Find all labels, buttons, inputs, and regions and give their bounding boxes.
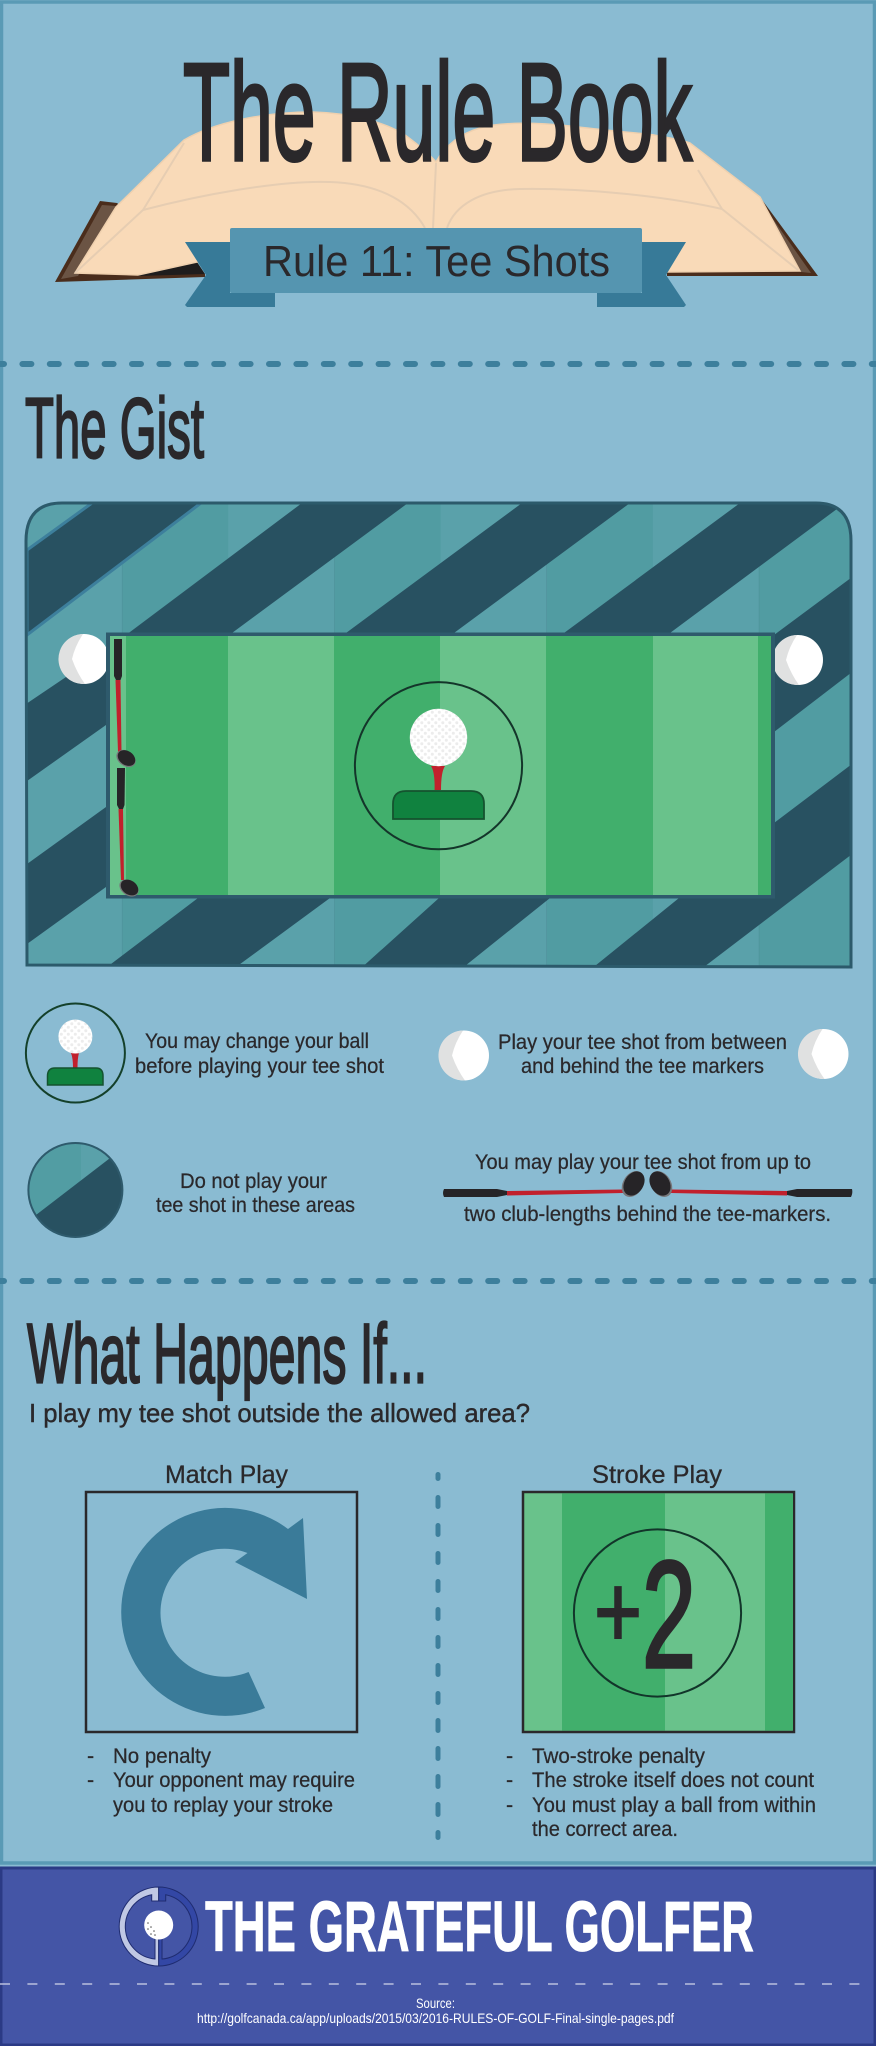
legend text top: You may play your tee shot from up to <box>475 1150 811 1174</box>
source: Source: <box>416 1995 455 2011</box>
legend: two club-lengths <box>443 1150 852 1226</box>
list: Your opponent may require <box>113 1768 355 1792</box>
legend text: and behind the tee markers <box>521 1054 764 1078</box>
legend text <box>156 1169 355 1217</box>
list: - <box>87 1768 94 1792</box>
subheading: I play my tee shot outside the allowed area? <box>29 1398 530 1428</box>
list: the correct area. <box>532 1817 678 1841</box>
legend text <box>498 1030 787 1078</box>
list: Two-stroke penalty <box>532 1744 705 1768</box>
legend: tee markers <box>438 1029 848 1081</box>
logo <box>119 1887 198 1966</box>
heading: Stroke Play <box>592 1461 722 1489</box>
banner: rule ribbon: Rule 11: Tee Shots <box>263 237 610 286</box>
footer divider <box>0 1983 876 1985</box>
footer background <box>1 1868 875 2045</box>
legend text: Play your tee shot from between <box>498 1030 787 1054</box>
footer <box>0 1868 876 2045</box>
panel: match play <box>86 1461 357 1817</box>
legend text: tee shot in these areas <box>156 1193 355 1217</box>
tee markers <box>58 634 823 685</box>
divider <box>0 361 876 367</box>
list: - <box>506 1793 513 1817</box>
legend text <box>135 1029 384 1078</box>
list <box>506 1744 816 1841</box>
icon: open book <box>55 112 818 282</box>
list <box>87 1744 355 1817</box>
icon: replay arrow <box>121 1508 307 1716</box>
list: No penalty <box>113 1744 211 1768</box>
list: - <box>506 1768 513 1792</box>
icon: left marker <box>438 1030 489 1081</box>
banner: rule ribbon <box>185 228 686 307</box>
list: you to replay your stroke <box>113 1793 333 1817</box>
legend text: before playing your tee shot <box>135 1054 384 1078</box>
box <box>86 1492 357 1732</box>
source: http://golfcanada.ca/app/uploads/2015/03/2016-RULES-OF-GOLF-Final-single-pages.pdf <box>197 2010 674 2026</box>
box with grass stripes <box>523 1492 794 1732</box>
club upper <box>113 639 139 771</box>
out-of-bounds striped area <box>20 503 876 970</box>
legend text bottom: two club-lengths behind the tee-markers. <box>464 1202 831 1226</box>
divider <box>0 1278 876 1284</box>
list: - <box>87 1744 94 1768</box>
icon: striped circle <box>27 1142 124 1238</box>
icon: ball on tee in circle <box>355 682 522 849</box>
club lower <box>116 768 142 900</box>
diagram: teeing area <box>20 503 876 970</box>
legend: no-play areas <box>27 1142 354 1238</box>
legend: change ball <box>26 1004 384 1102</box>
panel: stroke play <box>506 1461 816 1841</box>
icon: ball on tee <box>26 1004 125 1102</box>
icon: plus two penalty: + <box>594 1554 642 1670</box>
heading: What Happens If: What Happens If... <box>27 1306 427 1400</box>
vertical divider <box>436 1472 440 1840</box>
list: You must play a ball from within <box>532 1793 816 1817</box>
header: open book with title <box>55 35 818 307</box>
legend text: You may change your ball <box>145 1029 369 1053</box>
heading: Match Play <box>165 1461 288 1489</box>
icon: plus two penalty <box>574 1529 741 1700</box>
legend text: Do not play your <box>180 1169 327 1193</box>
fairway grass stripes <box>108 634 773 896</box>
list: The stroke itself does not count <box>532 1768 814 1792</box>
icon: two clubs <box>443 1167 852 1201</box>
icon: right marker <box>798 1029 848 1079</box>
heading: The Gist: The Gist <box>25 382 204 476</box>
list: - <box>506 1744 513 1768</box>
source <box>197 1995 674 2026</box>
icon: plus two penalty: 2 <box>642 1530 696 1700</box>
